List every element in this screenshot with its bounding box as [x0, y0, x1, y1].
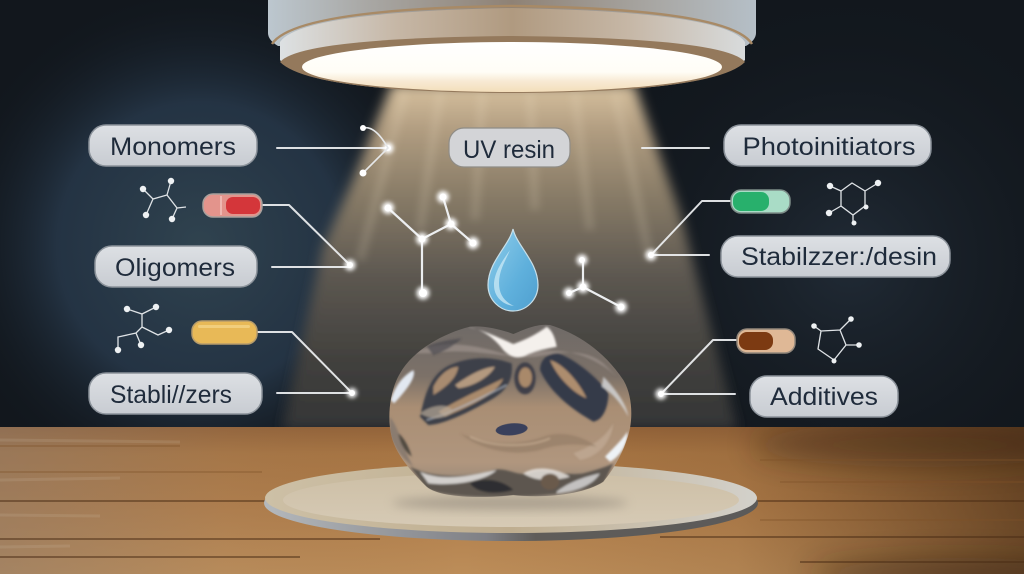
lamp glow: [302, 42, 722, 92]
glowing molecule: center right: [564, 254, 627, 313]
pill label: Stabilizers: Stabli//zers: [110, 381, 232, 409]
light beam: [282, 84, 738, 430]
pill label: Photoinitiators: Photoinitiators: [742, 133, 916, 161]
mid ripples: [460, 433, 597, 453]
molecule icon: right top hexagon: [826, 180, 881, 226]
pill label: Additives: Additives: [770, 383, 878, 411]
capsule: brown: [737, 329, 795, 353]
dark band left: [420, 358, 512, 425]
pill label: UV resin: UV resin: [463, 136, 555, 164]
pill label: Oligomers: [95, 246, 257, 287]
pill label: Monomers: Monomers: [110, 133, 236, 161]
capsule: yellow: [192, 321, 257, 344]
dark oval reflection: [496, 423, 528, 436]
glowing molecule: center left: [382, 191, 479, 300]
capsule: red: [203, 194, 262, 217]
round platform: [264, 463, 758, 541]
molecule icon: left lower: [115, 304, 172, 353]
connector glow dots: [344, 142, 666, 400]
wooden table: [0, 423, 1024, 574]
right rim: [602, 377, 628, 417]
capsule: green: [731, 190, 790, 213]
dark band right: [540, 353, 608, 422]
water drop: [488, 229, 538, 311]
connector lines: [258, 148, 738, 394]
pill label: Stabilizer/desin: Stabilzzer:/desin: [741, 243, 937, 271]
molecule near monomers connector: [360, 125, 388, 176]
clear resin blob: [389, 325, 631, 497]
bottom folds: [410, 463, 613, 497]
pill label: Stabilizers: [89, 373, 262, 414]
pill label: Photoinitiators: [724, 125, 931, 166]
top highlight: [468, 327, 557, 357]
pill label: Monomers: [89, 125, 257, 166]
blob reflections: [389, 327, 628, 497]
left edge clear zone: [389, 417, 413, 467]
lamp: [268, 0, 756, 93]
pill label: UV resin: [449, 128, 570, 167]
wall background: [0, 0, 1024, 430]
pill label: Stabilizer/desin: [721, 236, 950, 277]
pill label: Oligomers: Oligomers: [115, 254, 235, 282]
pill label: Additives: [750, 376, 898, 417]
upper haze: [417, 344, 609, 370]
molecule icon: left top: [140, 178, 186, 222]
center reflection: [514, 362, 536, 394]
left highlights: [391, 370, 414, 403]
molecule icon: right lower pentagon: [811, 316, 862, 364]
